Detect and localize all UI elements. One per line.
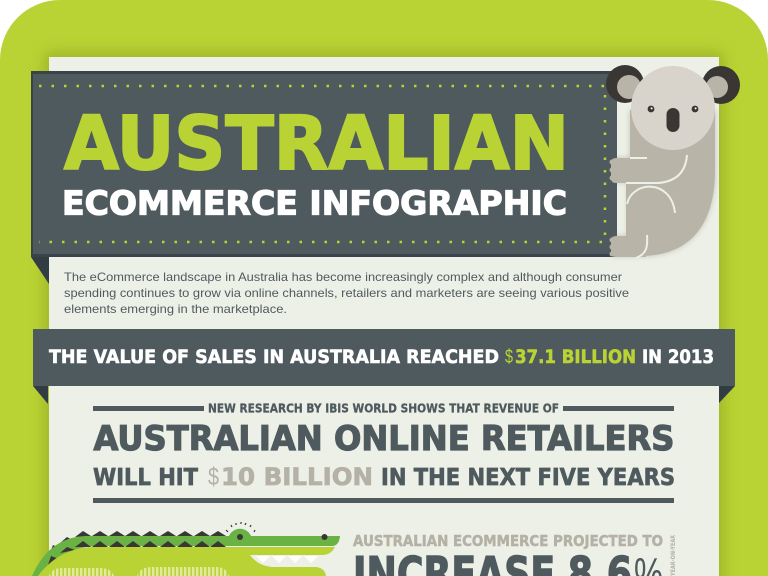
forecast dollar sign: $: [208, 463, 219, 491]
title: Australian: AUSTRALIAN: [64, 101, 569, 187]
paper panel: [49, 57, 719, 576]
ribbon value: 37.1 BILLION: [515, 346, 636, 368]
croc lower scales: [48, 541, 226, 565]
koala arm: [611, 158, 660, 183]
crocodile: [32, 522, 340, 576]
koala shadow: [612, 110, 715, 256]
projection intro: AUSTRALIAN ECOMMERCE PROJECTED TO: [353, 532, 663, 550]
dotted stitching: [39, 86, 605, 242]
forecast rules: [93, 406, 674, 503]
forecast timeframe: IN THE NEXT FIVE YEARS: [381, 465, 675, 491]
forecast: will hit: WILL HIT: [93, 465, 198, 491]
intro paragraph: elements emerging in the marketplace.: [64, 302, 287, 316]
forecast value: 10 BILLION: [221, 463, 373, 491]
forecast headline: AUSTRALIAN ONLINE RETAILERS: [94, 419, 674, 459]
croc teeth: [256, 556, 318, 563]
header banner: [31, 71, 617, 284]
intro paragraph: spending continues to grow via online channels, retailers and marketers are seeing various positive: [64, 286, 629, 300]
projection side label: YEAR-ON-YEAR: [669, 535, 677, 576]
ribbon body: [33, 329, 735, 386]
ribbon dollar sign: $: [505, 347, 513, 368]
croc lime body and jaw: [38, 547, 335, 576]
croc belly stripes: [49, 567, 229, 576]
koala right ear: [702, 66, 740, 104]
intro paragraph: The eCommerce landscape in Australia has become increasingly complex and although consumer: [64, 270, 622, 284]
forecast intro: NEW RESEARCH BY IBIS WORLD SHOWS THAT REVENUE OF: [208, 402, 559, 416]
koala left ear: [606, 65, 644, 103]
croc eyes: [237, 534, 243, 540]
ribbon folds: [33, 386, 735, 404]
croc back scales: [49, 531, 226, 555]
sales ribbon: [33, 329, 735, 404]
koala foot: [611, 236, 646, 257]
croc dark green back: [32, 529, 340, 576]
koala limb lines: [626, 155, 687, 258]
intro paragraph: [64, 270, 629, 316]
croc eyelash ticks: [226, 522, 255, 532]
ribbon year: IN 2013: [642, 346, 714, 368]
koala body: [626, 110, 715, 256]
ribbon headline: THE VALUE OF SALES IN AUSTRALIA REACHED: [49, 346, 499, 368]
banner fold: [31, 257, 49, 284]
projection text: [353, 532, 677, 576]
revenue forecast block: [93, 402, 675, 503]
banner body: [31, 71, 617, 257]
koala nose: [666, 108, 680, 132]
koala head: [631, 66, 715, 150]
koala eyes: [648, 106, 654, 112]
koala: [606, 65, 740, 258]
subtitle: eCommerce infographic: ECOMMERCE INFOGRAPHIC: [62, 184, 567, 222]
